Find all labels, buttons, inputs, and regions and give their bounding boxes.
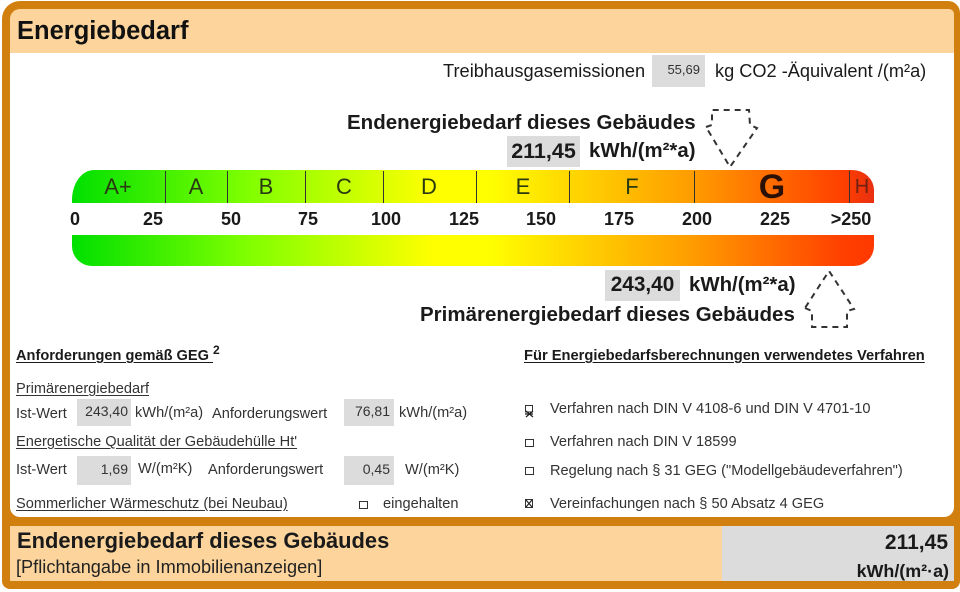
icon: down arrow marker	[706, 109, 758, 166]
method 1 checkbox	[525, 405, 534, 418]
greenhouse gas value: 55,69	[667, 62, 700, 77]
scale numbers: 150	[526, 209, 556, 229]
primary energy required unit: kWh/(m²a)	[399, 405, 467, 421]
scale numbers: 125	[449, 209, 479, 229]
primary energy heading: Primärenergiebedarf dieses Gebäudes	[420, 303, 795, 326]
class H: H	[855, 176, 869, 198]
envelope actual unit: W/(m²K)	[138, 461, 192, 477]
summer heat protection checkbox	[359, 501, 368, 509]
scale numbers: >250	[831, 209, 871, 229]
footer unit: kWh/(m²·a)	[857, 561, 949, 581]
footer band	[10, 526, 722, 581]
envelope required value: 0,45	[363, 461, 390, 477]
method 3 checkbox	[525, 467, 534, 475]
primary energy required value: 76,81	[355, 403, 390, 419]
header band	[10, 9, 954, 53]
white content panel	[10, 53, 954, 517]
primary energy value: 243,40	[611, 273, 674, 296]
final energy heading: Endenergiebedarf dieses Gebäudes	[347, 111, 696, 134]
scale numbers: 200	[682, 209, 712, 229]
footer value: 211,45	[885, 531, 948, 554]
class dividers	[165, 171, 850, 203]
envelope required unit: W/(m²K)	[405, 462, 459, 478]
class D: D	[421, 174, 437, 199]
class A: A	[189, 174, 203, 199]
envelope required label: Anforderungswert	[208, 462, 323, 478]
final energy unit: kWh/(m²*a)	[589, 140, 695, 162]
summer heat protection status: eingehalten	[383, 496, 458, 512]
class B: B	[259, 174, 273, 199]
method 3 text: Regelung nach § 31 GEG ("Modellgebäudeverfahren")	[550, 463, 903, 479]
primary energy actual label: Ist-Wert	[16, 406, 67, 422]
footer heading: Endenergiebedarf dieses Gebäudes	[17, 528, 389, 553]
class G: G	[759, 168, 785, 206]
upper scale bar	[72, 170, 874, 203]
envelope quality label: Energetische Qualität der Gebäudehülle Ht'	[16, 434, 297, 450]
scale numbers: 25	[143, 209, 163, 229]
scale numbers: 75	[298, 209, 318, 229]
greenhouse gas label: Treibhausgasemissionen	[443, 60, 645, 81]
requirements heading: Anforderungen gemäß GEG 2	[16, 343, 220, 364]
title: Energiebedarf	[17, 17, 188, 45]
footer note: [Pflichtangabe in Immobilienanzeigen]	[16, 557, 322, 577]
scale numbers: 175	[604, 209, 634, 229]
method 4 text: Vereinfachungen nach § 50 Absatz 4 GEG	[550, 496, 824, 512]
scale numbers: 0	[70, 209, 80, 229]
envelope actual value	[77, 456, 131, 485]
scale numbers: 225	[760, 209, 790, 229]
class C: C	[336, 174, 352, 199]
method 2 checkbox	[525, 439, 534, 447]
method 1 text: Verfahren nach DIN V 4108-6 und DIN V 4701-10	[550, 401, 870, 417]
scale numbers: 50	[221, 209, 241, 229]
scale numbers: 100	[371, 209, 401, 229]
primary energy requirement label: Primärenergiebedarf	[16, 381, 149, 397]
scale numbers	[70, 209, 871, 229]
greenhouse gas row	[443, 55, 926, 87]
class E: E	[516, 174, 530, 199]
envelope actual label: Ist-Wert	[16, 462, 67, 478]
method 2 text: Verfahren nach DIN V 18599	[550, 434, 737, 450]
class A+: A+	[104, 174, 132, 199]
greenhouse gas unit: kg CO2 -Äquivalent /(m²a)	[715, 61, 926, 81]
primary energy actual value: 243,40	[85, 403, 128, 419]
primary energy actual value	[77, 399, 131, 426]
primary energy required label: Anforderungswert	[212, 406, 327, 422]
class F: F	[625, 174, 639, 199]
primary energy value	[605, 270, 680, 301]
footer value panel	[722, 526, 954, 581]
summer heat protection label: Sommerlicher Wärmeschutz (bei Neubau)	[16, 496, 288, 512]
primary energy unit: kWh/(m²*a)	[689, 274, 795, 296]
final energy value: 211,45	[511, 139, 576, 163]
envelope required value	[344, 456, 394, 485]
method 4 checkbox	[525, 499, 533, 508]
primary energy required value	[344, 399, 394, 426]
lower scale bar	[72, 235, 874, 266]
greenhouse gas value	[652, 55, 705, 87]
icon: up arrow marker	[804, 270, 856, 328]
final energy value	[507, 136, 580, 167]
primary energy actual unit: kWh/(m²a)	[135, 405, 203, 421]
method heading: Für Energiebedarfsberechnungen verwendetes Verfahren	[524, 348, 925, 364]
envelope actual value: 1,69	[101, 461, 128, 477]
